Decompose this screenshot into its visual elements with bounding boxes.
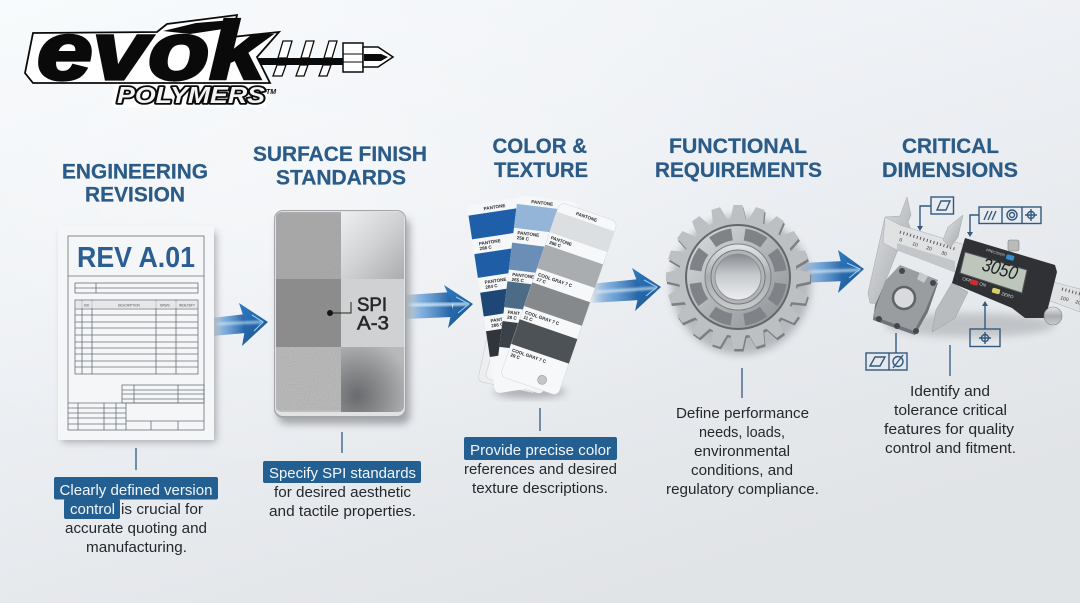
caption: functional requirements: conditions, and (691, 462, 793, 479)
heading: functional requirements: REQUIREMENTS (655, 158, 822, 182)
caption: color and texture (464, 437, 617, 497)
swatch card: blues: PANTONE (483, 203, 506, 211)
document: rev a.01 drawing: INDEXDFT (179, 304, 195, 308)
caption: surface finish: and tactile properties. (269, 503, 416, 520)
caliper buttons: OFF (962, 276, 972, 284)
caliper buttons: ZERO (1001, 291, 1015, 300)
swatch card: cool grays: 29 C (510, 352, 521, 360)
annotation: flatness and diameter (866, 333, 907, 370)
swatch card: steel blues: 28 C (507, 315, 518, 321)
connector line 4 (741, 368, 743, 398)
caliper lcd (960, 252, 1027, 293)
spi leader (330, 302, 351, 313)
swatch card: cool grays: 17 C (536, 277, 547, 285)
swatch card: blues: 284 C (485, 283, 499, 290)
swatch card: steel blues: 265 C (511, 277, 525, 283)
caption: functional requirements: environmental (694, 443, 790, 460)
caliper with part (866, 197, 1080, 370)
swatch card: steel blues: PANT (507, 310, 520, 316)
caption: engineering revision: Clearly defined version (60, 482, 212, 499)
heading: color and texture: COLOR & (492, 134, 587, 158)
swatch card: cool grays: PANTONE (575, 211, 598, 223)
heading: functional requirements: FUNCTIONAL (669, 134, 807, 158)
document: rev a.01 drawing: DESCRIPTION (118, 304, 140, 308)
swatch card: steel blues: 256 C (516, 235, 530, 242)
swatch card: cool grays: COOL GRAY 7 C (537, 272, 573, 289)
arrow 3 (590, 268, 661, 311)
caption: functional requirements: needs, loads, (699, 424, 785, 441)
document: rev a.01 drawing: DRWS (160, 304, 170, 308)
caliper with part: 30 (940, 250, 948, 258)
heading: engineering revision: ENGINEERING (62, 160, 208, 184)
swatch card: blues: PANTONE (478, 238, 501, 246)
spi texture swatches (276, 212, 404, 412)
caption: critical dimensions: control and fitment. (885, 440, 1016, 457)
caption: critical dimensions: features for quality (884, 421, 1015, 438)
caption: color and texture: Provide precise color (470, 442, 611, 459)
annotation: feature control frame (967, 207, 1041, 237)
logo wordmark: evok (37, 6, 270, 97)
connector line 5 (949, 345, 951, 376)
swatch card: steel blues (495, 195, 578, 391)
swatch card: steel blues: PANTONE (517, 230, 540, 238)
swatch card: cool grays: 11 C (523, 315, 534, 323)
swatch card: cool grays: PANTONE (550, 235, 573, 247)
swatch card: steel blues: PANTONE (531, 199, 553, 207)
heading: engineering revision (62, 160, 208, 206)
swatch card: steel blues: PANTONE (512, 272, 534, 280)
caliper beam (883, 217, 1080, 312)
caption: critical dimensions: Identify and (910, 383, 990, 400)
caption: engineering revision: is crucial for (121, 501, 203, 518)
arrow 2 (405, 285, 473, 328)
caliper scale ticks (900, 232, 955, 249)
caliper buttons: ON (979, 281, 987, 288)
gear windows (695, 234, 781, 320)
caption: surface finish: Specify SPI standards (269, 465, 416, 482)
connector line 2 (341, 432, 343, 453)
heading: color and texture (492, 134, 588, 182)
gear rim and web (686, 225, 790, 329)
spi label: A-3 (357, 314, 389, 334)
caption: surface finish (263, 461, 421, 520)
heading: critical dimensions (882, 134, 1018, 182)
logo screw icon (255, 41, 393, 76)
caption: critical dimensions (884, 383, 1016, 457)
arrow 4 (800, 250, 864, 293)
heading: critical dimensions: CRITICAL (902, 134, 999, 158)
caliper buttons (962, 248, 1015, 300)
caption: functional requirements (666, 405, 819, 498)
document: rev a.01 drawing (58, 226, 216, 442)
document: rev a.01 drawing: SID (84, 304, 90, 308)
heading: functional requirements (655, 134, 822, 182)
heading: surface finish standards: STANDARDS (276, 166, 406, 190)
caliper with part: 20 (925, 245, 933, 253)
caption: functional requirements: regulatory compliance. (666, 481, 819, 498)
logo polymers: POLYMERS (117, 82, 266, 108)
heading: surface finish standards: SURFACE FINISH (253, 142, 427, 166)
annotation: position (970, 301, 1000, 346)
caliper with part: 100 (1059, 295, 1069, 303)
caption: engineering revision: manufacturing. (86, 539, 187, 556)
caliper with part: 10 (911, 241, 919, 249)
heading: engineering revision: REVISION (85, 182, 185, 206)
arrow 1 (212, 303, 268, 346)
swatch card: blues (467, 196, 557, 394)
caliper with part: 0 (898, 237, 903, 244)
connector line 3 (539, 408, 541, 431)
swatch card: blues: 286 C (479, 244, 493, 251)
caliper reading: 3050 (980, 255, 1020, 285)
swatch card: cool grays: COOL GRAY 7 C (511, 348, 547, 364)
caption: color and texture: references and desired (464, 461, 617, 478)
heading: color and texture: TEXTURE (494, 158, 588, 182)
caption: engineering revision (54, 477, 218, 556)
spi label (357, 295, 389, 334)
caliper thumb wheel (1044, 307, 1062, 325)
gear hub (705, 244, 771, 310)
caliper moving jaw (943, 215, 963, 248)
swatch card: blues: PANT (490, 317, 503, 323)
caliper display body (952, 238, 1057, 318)
caliper knob (1008, 240, 1019, 251)
swatch card: blues: 286 C (491, 322, 504, 328)
surface finish plate (274, 210, 410, 424)
caption: color and texture: texture descriptions. (472, 480, 608, 497)
gear (666, 205, 811, 355)
logo polymers: TM (266, 89, 276, 96)
connector line 1 (135, 448, 137, 470)
caption: critical dimensions: tolerance critical (894, 402, 1007, 419)
logo polymers: POLYMERS (117, 82, 266, 108)
heading: surface finish standards (253, 142, 427, 190)
caliper fixed jaw (868, 197, 912, 304)
caliper buttons: PRECISION (986, 248, 1006, 257)
caption: engineering revision: accurate quoting and (65, 520, 207, 537)
caption: engineering revision: control (70, 501, 115, 518)
logo: evok polymers (25, 6, 393, 108)
swatch card: cool grays: 286 C (549, 240, 562, 249)
pantone swatch fan (467, 195, 618, 398)
gear teeth (666, 205, 810, 349)
swatch card: blues: PANTONE (484, 277, 507, 285)
heading: critical dimensions: DIMENSIONS (882, 158, 1018, 182)
annotation: flatness top (917, 197, 954, 231)
spi label: SPI (357, 295, 387, 316)
swatch card: cool grays (500, 202, 618, 396)
swatch card: cool grays: COOL GRAY 7 C (524, 310, 560, 326)
caption: functional requirements: Define performance (676, 405, 809, 422)
document: rev a.01 drawing: REV A.01 (77, 242, 195, 274)
machined part (873, 265, 938, 335)
caption: surface finish: for desired aesthetic (274, 484, 412, 501)
gear shaded base (667, 208, 811, 352)
